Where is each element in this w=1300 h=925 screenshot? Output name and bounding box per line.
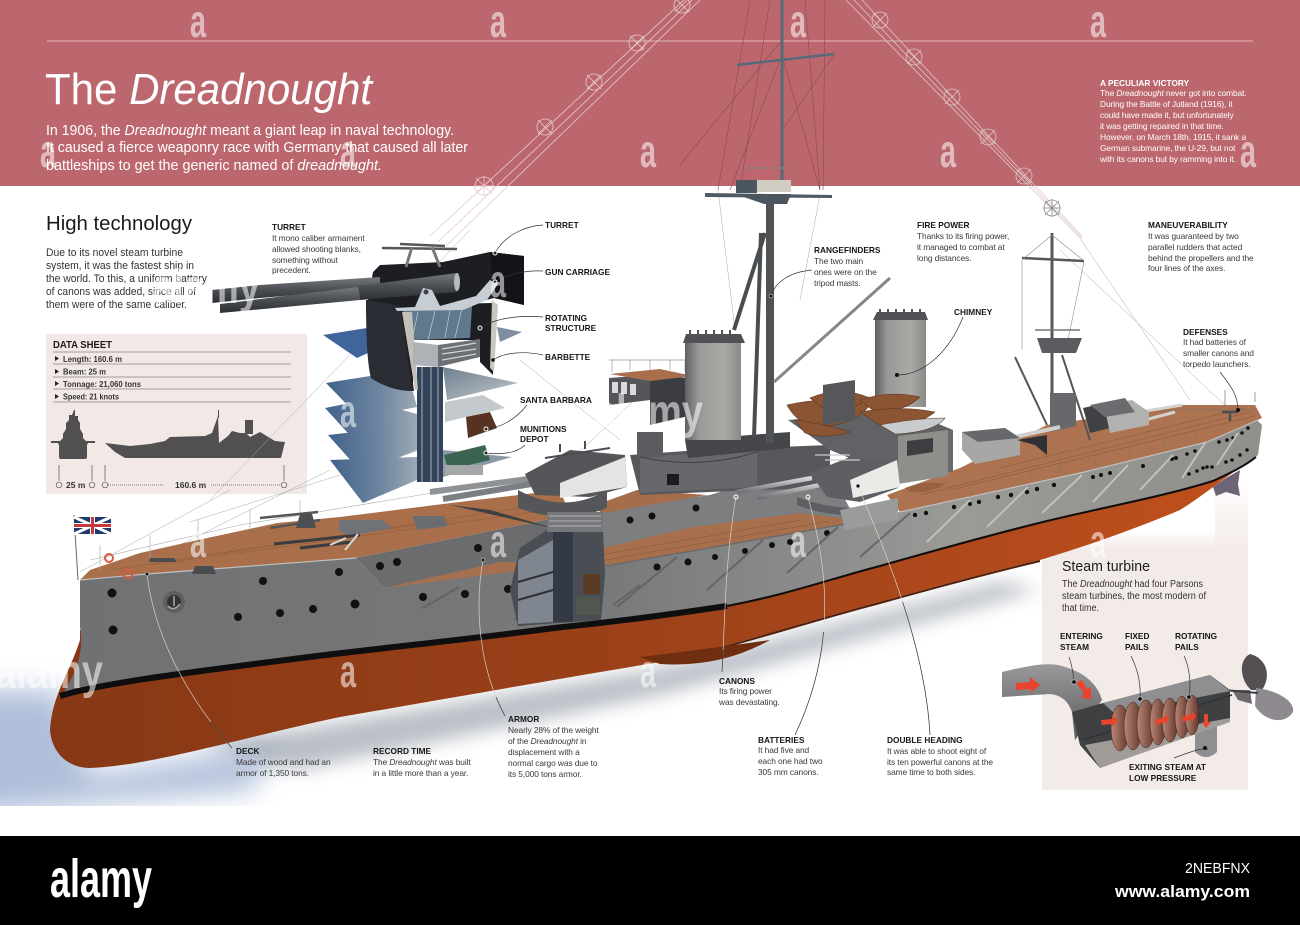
silhouette: side view: [105, 410, 285, 458]
boats: [787, 392, 945, 436]
watermark: a: [340, 125, 356, 177]
watermark: alamy: [152, 261, 260, 314]
hull cutaway: [510, 512, 605, 626]
label: record time: RECORD TIME: [373, 746, 432, 756]
midships block with window: [898, 430, 953, 484]
mast rigging in band: [680, 0, 834, 190]
watermark: a: [340, 385, 356, 437]
watermark: a: [640, 125, 656, 177]
propeller: [1232, 690, 1252, 704]
watermark: [0, 0, 1256, 699]
ship: [50, 0, 1262, 768]
title: The Dreadnought: [45, 65, 374, 114]
watermark: a: [790, 515, 806, 567]
labels: turret parts: [520, 220, 610, 444]
labels: turret parts: BARBETTE: [545, 352, 591, 362]
hull: lower orange: [50, 440, 1258, 768]
red steam arrows: [1016, 677, 1211, 728]
label: maneuverability: [1148, 220, 1254, 273]
heading: steam turbine: Steam turbine: [1062, 559, 1150, 575]
label: turret description: TURRET: [272, 222, 306, 232]
hull: waterline: [60, 457, 1256, 696]
watermark: alamy: [595, 386, 703, 439]
site url: www.alamy.com: [1114, 882, 1250, 901]
flag: [74, 515, 111, 580]
label: maneuverability: parallel rudders that acted: [1148, 242, 1243, 252]
keel shade: [660, 561, 1040, 663]
label: turret description: allowed shooting blanks,: [272, 244, 361, 254]
label: defenses: smaller canons and: [1183, 348, 1254, 358]
aft deck: [887, 405, 1262, 512]
label: rangefinders: ones were on the: [814, 267, 877, 277]
aft turret midships: [962, 427, 1060, 464]
label: deck: armor of 1,350 tons.: [236, 768, 309, 778]
labels: turbine: EXITING STEAM AT: [1129, 762, 1206, 772]
intro text: battleships to get the generic named of dreadnought.: [46, 158, 382, 174]
label: double heading: It was able to shoot eight of: [887, 746, 987, 756]
silhouette: front view: [51, 410, 95, 459]
forward deck: [80, 490, 570, 580]
aft turret stern: [1083, 398, 1182, 433]
label: defenses: It had batteries of: [1183, 337, 1247, 347]
text block: high technology: system, it was the fastest ship in: [46, 260, 194, 272]
text block: steam turbine: [1062, 579, 1206, 614]
boat crane block: [823, 380, 855, 425]
torpedo net booms: [423, 513, 910, 620]
label: batteries: each one had two: [758, 756, 823, 766]
labels: turret parts: DEPOT: [520, 434, 549, 444]
hull: upper grey: [62, 420, 1262, 695]
lower decks: [323, 328, 368, 358]
label: canons: Its firing power: [719, 686, 772, 696]
label: chimney: CHIMNEY: [954, 307, 993, 317]
label: armor: its 5,000 tons armor.: [508, 769, 582, 779]
crane boom: [774, 278, 890, 382]
label: double heading: [887, 735, 993, 777]
dimension: beam: [56, 465, 287, 488]
top rangefinder: [382, 244, 457, 249]
ship shadow: [0, 582, 1040, 815]
deck gear forward: [149, 505, 560, 574]
data sheet rows: Length: 160.6 m: [63, 354, 122, 364]
text block: a peculiar victory: could have made it, but unfortunately: [1100, 110, 1235, 120]
data sheet heading: DATA SHEET: [53, 340, 112, 351]
label: defenses: torpedo launchers.: [1183, 359, 1251, 369]
turbine diagram: [1002, 654, 1293, 768]
label: armor: normal cargo was due to: [508, 758, 598, 768]
label: canons: was devastating.: [718, 697, 780, 707]
label: defenses: DEFENSES: [1183, 327, 1228, 337]
panel: steam turbine background: [1042, 480, 1248, 790]
labels: turbine: LOW PRESSURE: [1129, 773, 1197, 783]
footer bar: [0, 836, 1300, 925]
inlet pipe: [1002, 664, 1102, 740]
text block: steam turbine: The Dreadnought had four Parsons: [1062, 579, 1203, 590]
light deck-edge: [600, 522, 857, 567]
hull boat under block: [905, 483, 945, 492]
hoist housing: [413, 342, 438, 367]
waist deck wedge: [384, 562, 525, 588]
label: rangefinders: The two main: [814, 256, 864, 266]
text block: high technology: Due to its novel steam turbine: [46, 247, 183, 259]
label: fire power: long distances.: [917, 253, 971, 263]
watermark: a: [490, 255, 506, 307]
labels: turret parts: GUN CARRIAGE: [545, 267, 610, 277]
label: fire power: it managed to combat at: [917, 242, 1005, 252]
casing: [1072, 675, 1230, 768]
label: turret description: precedent.: [272, 265, 311, 275]
stern propeller: [1213, 470, 1240, 496]
text block: a peculiar victory: it was getting repaired in that time.: [1100, 121, 1224, 131]
upper wall right of cutaway: [600, 470, 857, 567]
turret hood: [368, 252, 524, 306]
boat deck block: [788, 410, 953, 478]
labels: turret parts: SANTA BARBARA: [520, 395, 592, 405]
anchor: [163, 591, 185, 613]
centre turret: [737, 455, 900, 530]
panel: data sheet: [46, 334, 307, 494]
label: deck: Made of wood and had an: [236, 757, 331, 767]
labels: turret parts: MUNITIONS: [520, 424, 567, 434]
label: record time: in a little more than a year.: [373, 768, 468, 778]
watermark: a: [1090, 515, 1106, 567]
text block: steam turbine: steam turbines, the most modern of: [1062, 591, 1206, 602]
label: canons: CANONS: [719, 676, 755, 686]
label: batteries: [758, 735, 823, 777]
rigging lattice left: [430, 0, 700, 246]
turbine leaders: [1069, 656, 1208, 758]
leaders: turret: [478, 225, 543, 455]
label: batteries: It had five and: [758, 745, 810, 755]
munitions: [444, 445, 490, 470]
text block: high technology: [46, 247, 207, 311]
turret barbette: [366, 300, 414, 391]
label: double heading: same time to both sides.: [887, 767, 975, 777]
pail discs: [1111, 695, 1199, 751]
label: rangefinders: RANGEFINDERS: [814, 245, 881, 255]
label: deck: [236, 746, 331, 778]
exit pipe: [1195, 725, 1217, 757]
label: batteries: 305 mm canons.: [758, 767, 819, 777]
label: maneuverability: four lines of the axes.: [1148, 263, 1225, 273]
watermark: a: [190, 515, 206, 567]
funnel 1: [683, 330, 745, 440]
small stern gun: [1222, 412, 1238, 421]
text block: a peculiar victory: A PECULIAR VICTORY: [1100, 78, 1190, 88]
text block: high technology: the world. To this, a uniform battery: [46, 273, 207, 285]
label: rangefinders: tripod masts.: [814, 278, 861, 288]
bilge keel: [640, 640, 770, 664]
forward raised wall: [356, 515, 590, 588]
watermark: a: [640, 645, 656, 697]
label: armor: ARMOR: [508, 714, 539, 724]
railings: [90, 484, 500, 570]
labels: turbine: ROTATING: [1175, 631, 1217, 641]
funnel 2: [873, 309, 928, 407]
gun carriage: [395, 280, 498, 311]
central hoist: [417, 367, 443, 482]
labels: turbine: [1060, 631, 1217, 783]
watermark: a: [340, 645, 356, 697]
label: maneuverability: It was guaranteed by two: [1148, 231, 1239, 241]
shells: [466, 412, 497, 438]
life rings: [105, 442, 786, 578]
text block: steam turbine: that time.: [1062, 603, 1099, 614]
labels: turbine: ENTERING: [1060, 631, 1103, 641]
label: armor: displacement with a: [508, 747, 580, 757]
watermark: a: [40, 125, 56, 177]
panel: data sheet: 25 m: [66, 480, 86, 490]
main mast: [705, 0, 834, 443]
alamy logo: alamy: [50, 849, 152, 909]
label: double heading: DOUBLE HEADING: [887, 735, 963, 745]
label: armor: of the Dreadnought in: [508, 736, 587, 746]
text block: high technology: them were of the same caliber.: [46, 299, 187, 311]
labels: turbine: STEAM: [1060, 642, 1089, 652]
forward turret: [430, 441, 627, 516]
deck planks: [110, 505, 550, 570]
label: canons: [718, 676, 780, 707]
white floor mask: [0, 806, 1300, 836]
gun barrels: [212, 277, 380, 303]
aft mast: [1015, 233, 1090, 440]
data sheet rows: [55, 354, 141, 402]
label: fire power: Thanks to its firing power,: [917, 231, 1009, 241]
watermark: a: [940, 125, 956, 177]
label: fire power: [917, 220, 1009, 263]
waist deck right: [585, 513, 857, 567]
label: armor: Nearly 28% of the weight: [508, 725, 599, 735]
data sheet rows: Tonnage: 21,060 tons: [63, 379, 141, 389]
label: turret description: something without: [272, 255, 339, 265]
label: deck: DECK: [236, 746, 260, 756]
leaders: ship: [145, 270, 1240, 748]
label: defenses: [1183, 327, 1254, 369]
label: record time: [373, 746, 471, 778]
hull edge highlight: [80, 420, 1258, 580]
text block: a peculiar victory: German submarine, the U-29, but not: [1100, 143, 1236, 153]
aft deck stanchions: [970, 390, 1255, 497]
labels: turret parts: STRUCTURE: [545, 323, 597, 333]
labels: turret parts: ROTATING: [545, 313, 587, 323]
text block: a peculiar victory: However, on March 18th, 1915, it sank a: [1100, 132, 1246, 142]
label: turret description: It mono caliber armament: [272, 233, 365, 243]
label: batteries: BATTERIES: [758, 735, 805, 745]
heading: high technology: High technology: [46, 212, 193, 235]
text block: a peculiar victory: During the Battle of Jutland (1916), it: [1100, 99, 1233, 109]
upper deck wood: [590, 490, 707, 513]
image id: 2NEBFNX: [1185, 860, 1250, 877]
text block: a peculiar victory: The Dreadnought never got into combat.: [1100, 88, 1247, 98]
text block: a peculiar victory: with its canons but by ramming into it.: [1099, 154, 1236, 164]
watermark: a: [490, 515, 506, 567]
text block: high technology: of canons was added, since all of: [46, 286, 197, 298]
text block: a peculiar victory: [1099, 78, 1247, 164]
label: maneuverability: MANEUVERABILITY: [1148, 220, 1228, 230]
data sheet rows: Beam: 25 m: [63, 366, 106, 376]
watermark: a: [1240, 125, 1256, 177]
labels: turbine: FIXED: [1125, 631, 1149, 641]
intro text: In 1906, the Dreadnought meant a giant leap in naval technology.: [46, 123, 454, 139]
label: fire power: FIRE POWER: [917, 220, 970, 230]
main superstructure: [630, 445, 830, 495]
turret cutaway: [212, 244, 524, 503]
rigging lines: [80, 190, 1230, 572]
data sheet rows: Speed: 21 knots: [63, 392, 119, 402]
intro text: [46, 123, 468, 174]
label: maneuverability: behind the propellers and the: [1148, 253, 1254, 263]
labels: turret parts: TURRET: [545, 220, 579, 230]
labels: turbine: PAILS: [1125, 642, 1149, 652]
bridge: [609, 360, 693, 425]
label: turret description: [272, 222, 365, 275]
rigging lattice right: [846, 0, 1082, 240]
label: record time: The Dreadnought was built: [373, 757, 471, 767]
intro text: It caused a fierce weaponry race with Germany that caused all later: [46, 140, 468, 156]
labels: turbine: PAILS: [1175, 642, 1199, 652]
portholes: [108, 426, 1250, 634]
dimension: length: 160.6 m: [175, 480, 207, 490]
label: double heading: its ten powerful canons at the: [887, 757, 993, 767]
label: rangefinders: [814, 245, 881, 288]
label: armor: [508, 714, 599, 779]
header band: [0, 0, 1300, 186]
